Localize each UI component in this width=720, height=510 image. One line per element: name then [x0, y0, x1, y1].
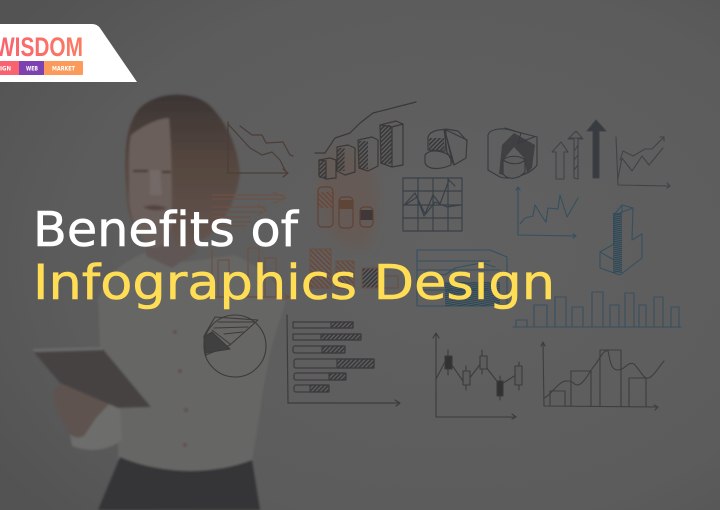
chart: vertical orange bars: [212, 248, 290, 300]
title: [33, 202, 555, 311]
chart: big 3D pie: [488, 128, 537, 178]
sketches: [204, 102, 681, 419]
logo tags: [0, 61, 83, 75]
hair: [125, 95, 240, 247]
blurred hand behind drawings: [318, 149, 378, 248]
chart: three arrows: [552, 120, 606, 179]
chart: orange cylinders: [318, 187, 373, 228]
chart: grid with lines: [403, 178, 462, 231]
logo badge: [0, 24, 137, 82]
face: [129, 118, 172, 248]
shirt: [98, 252, 286, 472]
chart: blue grid area: [417, 250, 507, 306]
chart: candlesticks: [433, 333, 522, 419]
chart: rising double line: [616, 137, 670, 188]
chart: blue 3D bar: [600, 205, 642, 275]
logo tags: IGN: [0, 64, 11, 72]
skirt: [98, 457, 260, 510]
chart: 3D bars with trend line: [315, 102, 416, 179]
chart: blue line chart: [516, 187, 578, 238]
tablet: [32, 348, 151, 408]
title: Infographics Design: [33, 255, 555, 311]
chart: stepped area with curve: [541, 342, 664, 410]
chart: orange sketch columns: [310, 249, 398, 288]
hand: [54, 383, 111, 438]
sleeve: [70, 400, 122, 450]
eyes and mouth: [133, 171, 171, 172]
chart: blue columns: [513, 292, 681, 327]
nose highlight: [150, 170, 162, 195]
logo tags: WEB: [26, 64, 38, 72]
chart: 3D pie small: [425, 129, 467, 169]
logo tags: MARKET: [52, 64, 75, 72]
neck: [146, 215, 196, 268]
chart: horizontal sketch bars: [287, 315, 400, 406]
chart: horizontal arrows: [212, 192, 286, 226]
shirt buttons: [173, 330, 188, 447]
chart: sketch pie: [204, 315, 266, 377]
woman holding tablet: [32, 95, 286, 510]
chart: falling lines: [228, 122, 293, 177]
title: Benefits of: [33, 202, 299, 258]
